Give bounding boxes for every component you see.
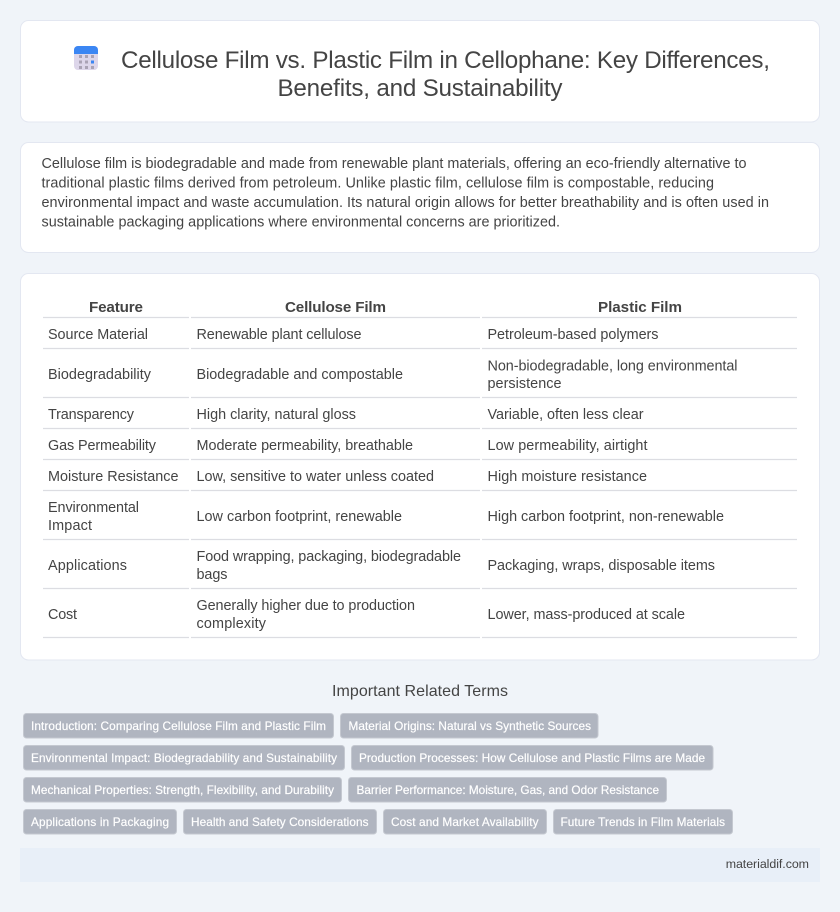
chip: Environmental Impact: Biodegradability and Sustainability xyxy=(31,751,337,765)
text block: introduction paragraph: Cellulose film is biodegradable and made from renewable plant materials, offering an eco-friendly alternative to xyxy=(42,156,746,172)
chip: Cost and Market Availability xyxy=(391,815,539,829)
chip: Future Trends in Film Materials xyxy=(560,815,725,829)
row: cost: Lower, mass-produced at scale xyxy=(488,607,685,623)
chip xyxy=(340,714,598,738)
text block: introduction paragraph xyxy=(42,156,769,230)
row: environmental impact: High carbon footprint, non-renewable xyxy=(488,509,724,525)
chip: Barrier Performance: Moisture, Gas, and Odor Resistance xyxy=(356,783,659,797)
row: applications xyxy=(48,549,715,583)
row: cost: Generally higher due to production xyxy=(196,598,415,614)
row: environmental impact: Impact xyxy=(48,518,92,534)
row: biodegradability: Biodegradability xyxy=(48,367,152,383)
table header row: Feature xyxy=(89,299,143,316)
row: environmental impact: Environmental xyxy=(48,500,139,516)
row: source material xyxy=(48,327,658,343)
panel: introduction xyxy=(20,142,820,252)
chip xyxy=(184,810,376,834)
header panel xyxy=(20,20,820,122)
heading: important related terms: Important Related Terms xyxy=(332,683,508,700)
chip xyxy=(24,778,342,802)
table header row: Plastic Film xyxy=(598,299,682,316)
row: transparency: Transparency xyxy=(48,407,135,423)
row: cost xyxy=(48,598,685,632)
row: source material: Petroleum-based polymers xyxy=(488,327,658,343)
panel: comparison table xyxy=(20,274,820,660)
title xyxy=(121,47,770,102)
icon: calendar xyxy=(74,46,98,70)
row: moisture resistance xyxy=(48,469,647,485)
row: environmental impact xyxy=(48,500,724,534)
text block: introduction paragraph: traditional plastic films derived from petroleum. Unlike plastic film, cellulose film is compostable, reducing xyxy=(42,175,714,191)
row: environmental impact: Low carbon footprint, renewable xyxy=(196,509,402,525)
chip: Introduction: Comparing Cellulose Film and Plastic Film xyxy=(31,719,326,733)
row: cost: Cost xyxy=(48,607,77,623)
row: applications: Packaging, wraps, disposable items xyxy=(488,558,715,574)
row: gas permeability: Low permeability, airtight xyxy=(488,438,648,454)
chip xyxy=(554,810,732,834)
row: cost: complexity xyxy=(196,616,267,632)
chip xyxy=(348,778,666,802)
table header row xyxy=(89,299,682,316)
row: biodegradability: Biodegradable and compostable xyxy=(196,367,403,383)
row: moisture resistance: Moisture Resistance xyxy=(48,469,178,485)
row: moisture resistance: High moisture resistance xyxy=(488,469,647,485)
footer source text: materialdif.com xyxy=(726,857,809,871)
chip: Health and Safety Considerations xyxy=(191,815,369,829)
row: transparency: High clarity, natural gloss xyxy=(196,407,356,423)
row: biodegradability: persistence xyxy=(488,376,562,392)
related terms chips xyxy=(24,714,732,834)
row: biodegradability xyxy=(48,358,738,392)
text block: introduction paragraph: environmental impact and waste accumulation. Its natural origin allows for better breathability and is often used in xyxy=(42,195,769,211)
footer bar xyxy=(20,848,820,882)
table header row: Cellulose Film xyxy=(285,299,386,316)
row: transparency xyxy=(48,407,644,423)
row: source material: Renewable plant cellulose xyxy=(196,327,362,343)
chip: Applications in Packaging xyxy=(31,815,169,829)
chip xyxy=(384,810,546,834)
row: gas permeability xyxy=(48,438,648,454)
title: Benefits, and Sustainability xyxy=(278,75,563,102)
row: transparency: Variable, often less clear xyxy=(488,407,644,423)
row: biodegradability: Non-biodegradable, long environmental xyxy=(488,358,738,374)
chip xyxy=(352,746,713,770)
title: Cellulose Film vs. Plastic Film in Cellophane: Key Differences, xyxy=(121,47,770,74)
chip: Production Processes: How Cellulose and Plastic Films are Made xyxy=(359,751,705,765)
row: gas permeability: Gas Permeability xyxy=(48,438,157,454)
row: applications: bags xyxy=(196,567,228,583)
table rule lines xyxy=(43,318,797,638)
chip: Mechanical Properties: Strength, Flexibility, and Durability xyxy=(31,783,334,797)
text block: introduction paragraph: sustainable packaging applications where environmental concerns are prioritized. xyxy=(42,214,560,230)
row: gas permeability: Moderate permeability, breathable xyxy=(196,438,413,454)
chip xyxy=(24,746,344,770)
row: applications: Food wrapping, packaging, biodegradable xyxy=(196,549,461,565)
chip xyxy=(24,714,334,738)
row: applications: Applications xyxy=(48,558,127,574)
chip xyxy=(24,810,176,834)
row: moisture resistance: Low, sensitive to water unless coated xyxy=(196,469,434,485)
row: source material: Source Material xyxy=(48,327,148,343)
chip: Material Origins: Natural vs Synthetic Sources xyxy=(348,719,591,733)
